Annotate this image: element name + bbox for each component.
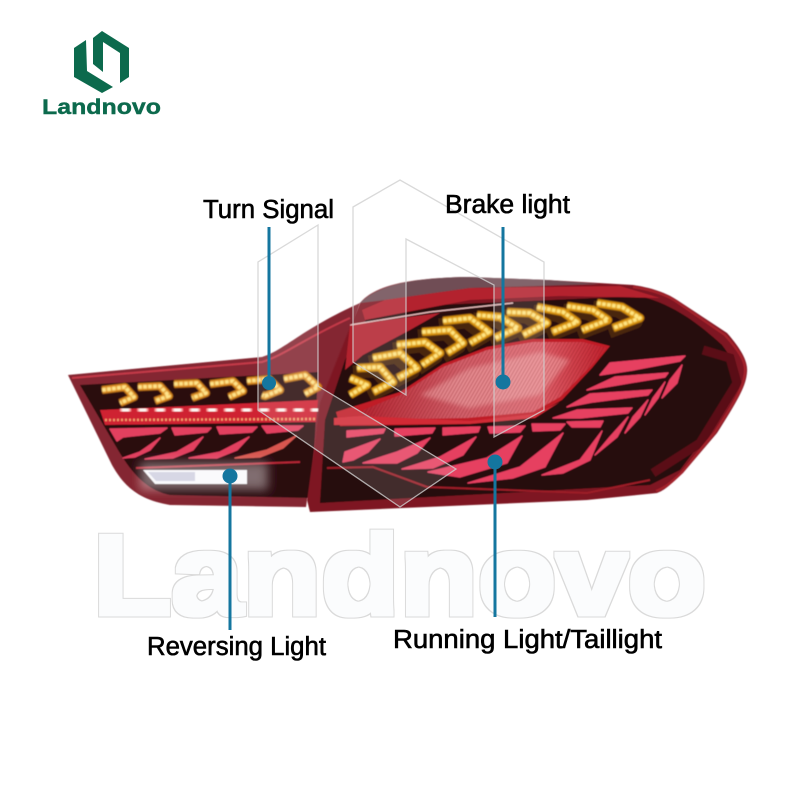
watermark word: Landnovo <box>93 512 706 638</box>
label: Brake light <box>445 191 570 390</box>
logo: Landnovo <box>42 31 161 119</box>
right lamp outer rim <box>633 287 745 491</box>
watermark hexagon logo <box>258 180 544 507</box>
left lamp lower trim <box>136 462 300 468</box>
left running light fins <box>110 426 303 459</box>
label: Turn Signal: Turn Signal <box>203 196 334 224</box>
reversing light <box>140 462 268 490</box>
right lamp lower trim line <box>327 467 650 493</box>
left lamp upper trim <box>72 318 350 378</box>
right turn signal chevrons <box>350 303 640 396</box>
label: Running Light/Taillight <box>393 454 662 654</box>
right running light fins <box>343 356 685 483</box>
left turn signal chevrons <box>102 375 318 403</box>
right lamp shell <box>307 277 747 512</box>
right tail lamp <box>307 277 747 512</box>
right lamp upper gray band <box>360 277 600 303</box>
right lamp outer reflector <box>653 350 737 473</box>
left lamp dark panel <box>80 372 318 498</box>
label: Turn Signal <box>203 196 334 390</box>
left tail lamp <box>68 303 360 507</box>
red band under brake lens <box>334 402 560 425</box>
left red light strip <box>100 400 318 425</box>
brake light lens <box>336 339 610 426</box>
left lamp shell <box>68 303 360 507</box>
white highlight line <box>350 303 513 325</box>
logo: Landnovo: Landnovo <box>42 96 161 119</box>
bright wedge <box>345 303 513 370</box>
label: Brake light: Brake light <box>445 191 570 219</box>
label: Reversing Light: Reversing Light <box>147 633 326 661</box>
label: Running Light/Taillight: Running Light/Taillight <box>393 626 662 654</box>
label: Reversing Light <box>147 468 326 661</box>
right lamp dark body <box>320 296 734 503</box>
right lamp upper red band <box>362 286 660 320</box>
